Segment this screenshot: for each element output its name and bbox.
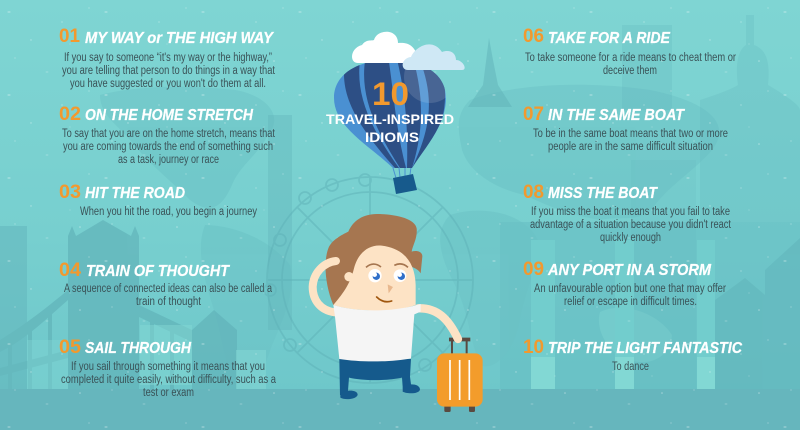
mouth xyxy=(377,297,392,302)
idiom 08: quickly enough xyxy=(600,232,661,244)
basket xyxy=(393,174,417,194)
envelope xyxy=(334,63,446,168)
idiom 05 xyxy=(59,337,276,399)
idiom 09: 09 xyxy=(523,259,544,280)
idiom 03: 03 xyxy=(59,182,81,203)
idiom 07: To be in the same boat means that two or more xyxy=(533,128,728,140)
idiom 09 xyxy=(523,259,726,308)
light columns xyxy=(27,240,715,389)
idiom 06 xyxy=(523,26,736,77)
arm right xyxy=(418,308,458,339)
idiom 01: you are telling that person to do things in a way that xyxy=(62,65,276,77)
idiom 04: train of thought xyxy=(136,296,202,308)
idiom 01: MY WAY or THE HIGH WAY xyxy=(85,30,275,47)
idiom 07: people are in the same difficult situation xyxy=(548,141,713,153)
idiom 02: you are coming towards the end of something such xyxy=(63,141,273,153)
idiom 06: TAKE FOR A RIDE xyxy=(548,30,671,47)
title: IDIOMS xyxy=(365,129,419,145)
idiom 02: as a task, journey or race xyxy=(118,154,219,166)
idiom 02 xyxy=(59,104,276,166)
idiom 06: 06 xyxy=(523,26,544,47)
idiom 02: To say that you are on the home stretch, means that xyxy=(62,128,276,140)
face xyxy=(333,246,416,311)
eyes xyxy=(368,269,382,282)
title xyxy=(326,76,454,145)
idiom 05: 05 xyxy=(59,337,81,358)
right landmarks xyxy=(622,15,800,389)
cloud: light blue xyxy=(403,44,465,70)
ground xyxy=(0,389,800,430)
idiom 10: TRIP THE LIGHT FANTASTIC xyxy=(548,340,743,357)
idiom 05: completed it quite easily, without difficulty, such as a xyxy=(61,374,276,386)
idiom 01: you have suggested or you won't do them at all. xyxy=(70,78,266,90)
idiom 04: 04 xyxy=(59,260,81,281)
idiom 04: A sequence of connected ideas can also be called a xyxy=(64,283,272,295)
idiom 06: deceive them xyxy=(603,65,657,77)
idiom 04: TRAIN OF THOUGHT xyxy=(86,263,230,280)
idiom 03 xyxy=(59,182,257,218)
left tower and bridge xyxy=(0,115,292,389)
idiom 03: When you hit the road, you begin a journey xyxy=(80,206,257,218)
suitcase xyxy=(437,338,483,412)
idiom 10: To dance xyxy=(612,361,649,373)
world map silhouette xyxy=(100,85,719,391)
idiom 03: HIT THE ROAD xyxy=(85,185,185,202)
title: 10 xyxy=(372,76,409,112)
idiom 07: 07 xyxy=(523,104,544,125)
nose xyxy=(388,284,393,293)
idiom 08 xyxy=(523,182,732,244)
idiom 05: If you sail through something it means that you xyxy=(71,361,265,373)
idiom 05: SAIL THROUGH xyxy=(85,340,192,357)
idiom 05: test or exam xyxy=(143,387,194,399)
idiom 08: 08 xyxy=(523,182,544,203)
idiom 01 xyxy=(59,26,276,90)
idiom 09: ANY PORT IN A STORM xyxy=(547,262,712,279)
idiom 10: 10 xyxy=(523,337,544,358)
cloud: white xyxy=(352,32,417,63)
idiom 08: If you miss the boat it means that you fail to take xyxy=(531,206,730,218)
idiom 09: relief or escape in difficult times. xyxy=(564,296,697,308)
shirt xyxy=(333,304,421,361)
idiom 09: An unfavourable option but one that may offer xyxy=(534,283,726,295)
idiom 10 xyxy=(523,337,743,373)
trousers and shoes xyxy=(339,359,411,395)
idiom 02: ON THE HOME STRETCH xyxy=(85,107,254,124)
arm left xyxy=(313,261,336,312)
title: TRAVEL-INSPIRED xyxy=(326,111,454,127)
character with suitcase xyxy=(313,214,483,412)
hot air balloon xyxy=(334,63,446,194)
idiom 01: 01 xyxy=(59,26,80,47)
hair back xyxy=(326,214,422,305)
idiom 07: IN THE SAME BOAT xyxy=(548,107,685,124)
ferris wheel xyxy=(264,174,473,383)
right lower backdrop xyxy=(500,222,800,389)
idiom 06: To take someone for a ride means to cheat them or xyxy=(525,52,736,64)
idiom 01: If you say to someone “it's my way or the highway,” xyxy=(64,52,272,64)
eiffel tower xyxy=(468,38,512,107)
idiom 07 xyxy=(523,104,728,153)
idiom 04 xyxy=(59,260,272,308)
idiom 02: 02 xyxy=(59,104,81,125)
ropes xyxy=(393,167,411,178)
idiom 08: advantage of a situation because you didn't react xyxy=(530,219,732,231)
idiom 08: MISS THE BOAT xyxy=(548,185,658,202)
